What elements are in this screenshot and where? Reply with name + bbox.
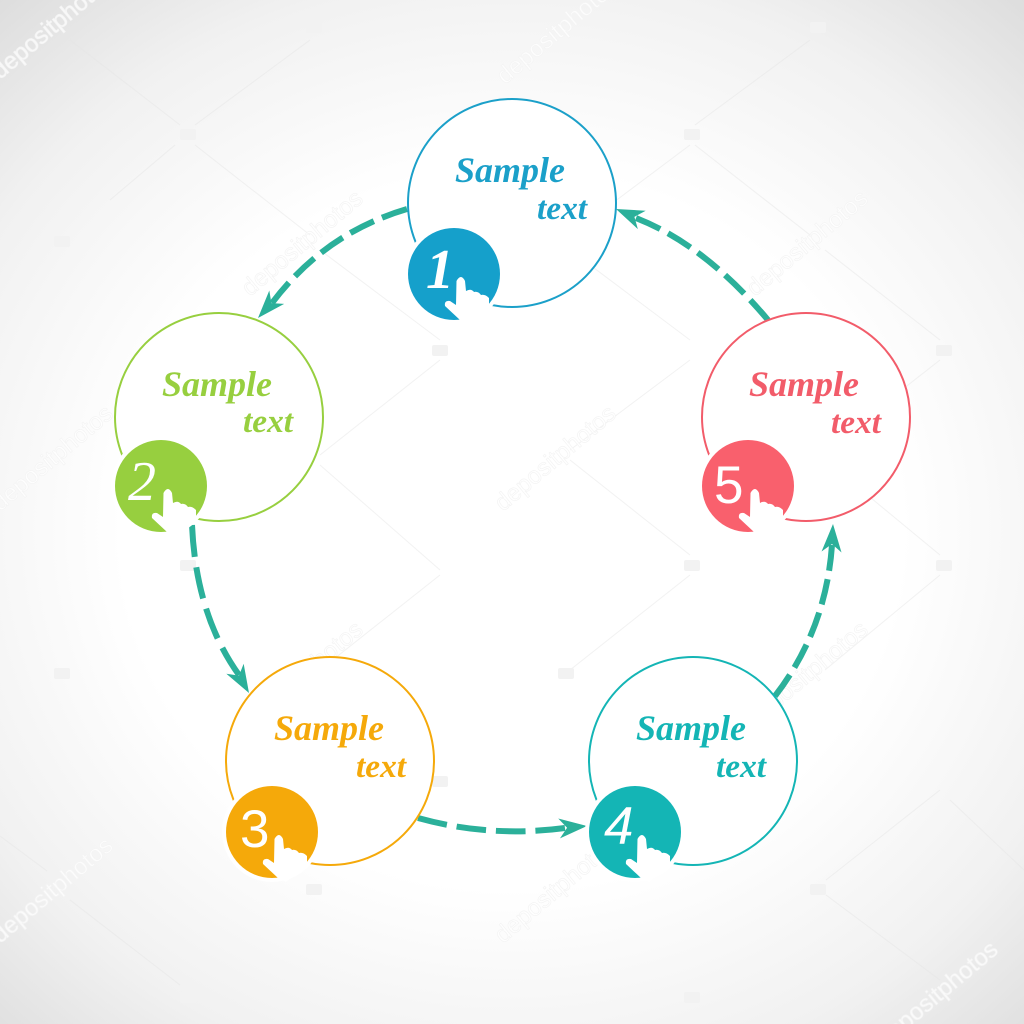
badge: step 1: 1 <box>426 239 454 301</box>
heading: step 5: Sample <box>749 364 859 404</box>
label: step 4: text <box>716 749 767 785</box>
arrow: step 3 to step 4 <box>418 816 588 838</box>
icon: pointing hand <box>739 489 783 536</box>
arrow: step 5 to step 1 <box>612 200 768 320</box>
heading: step 1: Sample <box>455 150 565 190</box>
badge: step 5: 5 <box>714 456 743 515</box>
watermark: depositphotos <box>490 832 621 949</box>
watermark: depositphotos <box>237 185 368 302</box>
label: step 1: text <box>537 191 588 227</box>
watermark: depositphotos <box>742 616 873 733</box>
step 3 panel <box>222 657 434 882</box>
icon: pointing hand <box>445 277 489 324</box>
arrow: step 1 to step 2 <box>251 209 407 325</box>
watermark: depositphotos <box>742 185 873 302</box>
heading: step 2: Sample <box>162 364 272 404</box>
badge: step 4: 4 <box>604 797 633 856</box>
label: step 5: text <box>831 405 882 441</box>
badge: step 1 <box>408 228 500 324</box>
watermark: depositphotos <box>490 400 621 517</box>
badge: step 2 <box>115 440 207 536</box>
step 4 panel <box>585 657 797 882</box>
label: step 3: text <box>356 749 407 785</box>
icon: pointing hand <box>152 489 196 536</box>
icon: pointing hand <box>263 835 307 882</box>
step 2 panel <box>111 313 323 536</box>
arrow: step 2 to step 3 <box>192 525 258 698</box>
badge: step 3: 3 <box>240 800 269 859</box>
icon: pointing hand <box>626 835 670 882</box>
watermark: depositphotos <box>237 616 368 733</box>
badge: step 2: 2 <box>128 451 156 513</box>
step 1 panel <box>404 99 616 324</box>
heading: step 3: Sample <box>274 708 384 748</box>
badge: step 3 <box>226 786 318 882</box>
badge: step 4 <box>589 786 681 882</box>
label: step 2: text <box>243 404 294 440</box>
step 5 panel <box>698 313 910 536</box>
arrow: step 4 to step 5 <box>775 523 843 696</box>
badge: step 5 <box>702 440 794 536</box>
heading: step 4: Sample <box>636 708 746 748</box>
